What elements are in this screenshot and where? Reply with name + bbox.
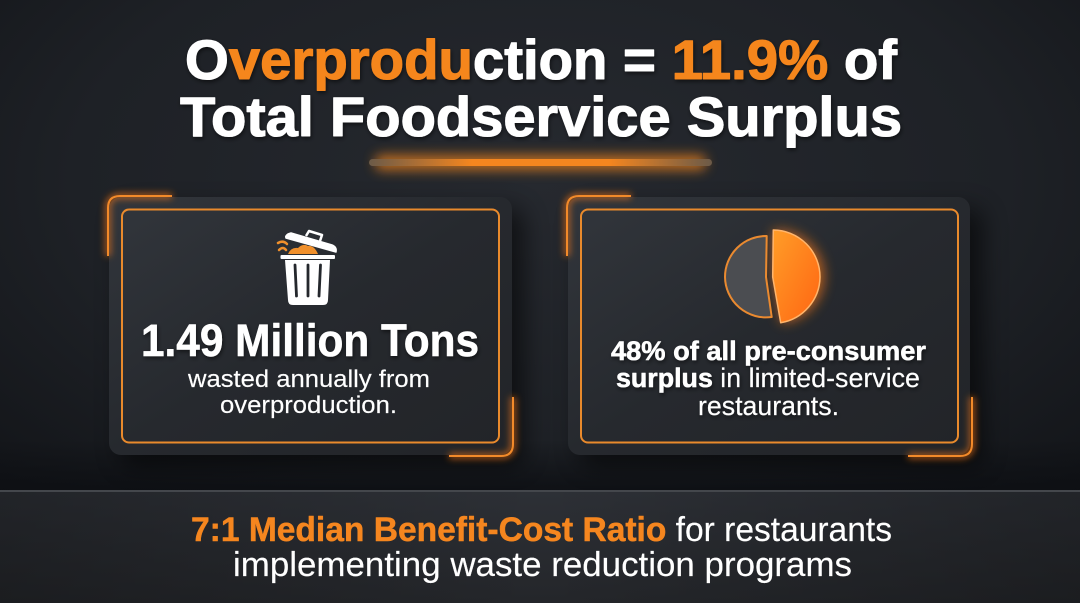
title underline: [369, 155, 712, 170]
text: wasted annually: [187, 366, 430, 419]
panel: limited-service share: [567, 196, 983, 466]
icon: trash can with food: [278, 231, 336, 305]
text: benefit-cost ratio: 7:1 Median Benefit-Cost Ratio for restaurants: [191, 511, 892, 549]
title: Overproduction = 11.9% of: [185, 28, 897, 91]
text: wasted annually: overproduction.: [220, 392, 397, 419]
icon: pie chart: [725, 230, 824, 323]
text: 48% of pre-consumer surplus: 48% of all pre-consumer: [611, 336, 926, 366]
panel: annual tons wasted: [108, 196, 524, 466]
text: benefit-cost ratio: implementing waste reduction programs: [233, 546, 852, 584]
title: Total Foodservice Surplus: [180, 85, 902, 148]
text: wasted annually: wasted annually from: [187, 366, 430, 393]
text: 48% of pre-consumer surplus: [611, 336, 926, 421]
title: [180, 28, 902, 148]
bottom band: [0, 490, 1080, 603]
text: 48% of pre-consumer surplus: surplus in limited-service: [616, 363, 920, 393]
text: 48% of pre-consumer surplus: restaurants.: [698, 391, 839, 421]
stat: 1.49 Million Tons: 1.49 Million Tons: [141, 315, 479, 366]
text: benefit-cost ratio: [191, 511, 892, 584]
